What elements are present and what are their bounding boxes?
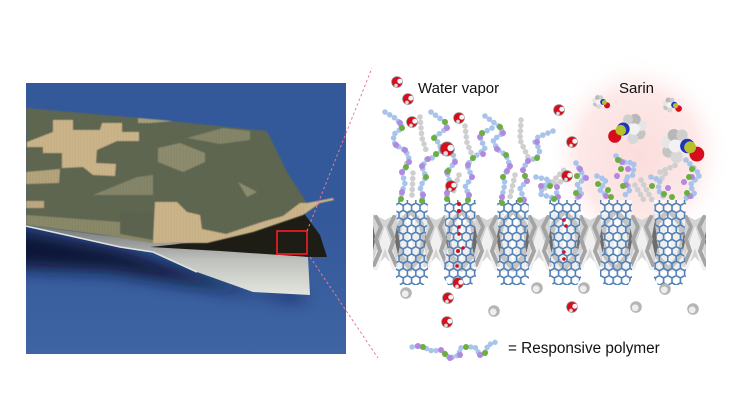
- sarin molecules: [592, 95, 704, 163]
- white fabric layer: [26, 225, 310, 295]
- white fabric front edge: [26, 226, 197, 272]
- label: Water vapor: Water vapor: [418, 80, 499, 97]
- carbon nanotubes: [396, 200, 686, 285]
- grey collapsed and background chains: [412, 117, 676, 202]
- polymer purple beads: [393, 120, 695, 203]
- shadow under fabric: [10, 226, 310, 300]
- photo background: blue surface: [26, 83, 346, 354]
- carbon sheets: [357, 212, 723, 272]
- compressed responsive polymer chains: sarin side: [536, 156, 700, 200]
- legend text: = Responsive polymer: [508, 340, 660, 357]
- panel: fabric photograph: [10, 83, 346, 354]
- legend polymer chain: [412, 342, 496, 361]
- polymer green beads: [398, 119, 695, 206]
- water fragments inside nanotubes: [455, 202, 568, 268]
- legend: responsive polymer: [412, 340, 660, 361]
- water molecules: [392, 77, 577, 327]
- label: Sarin: Sarin: [619, 80, 654, 97]
- red selection box: [277, 231, 307, 254]
- panel: membrane schematic: [373, 75, 711, 328]
- grey counter spheres: [400, 282, 699, 317]
- camouflage fabric layer: [26, 108, 334, 243]
- extended responsive polymer chains: water vapor side: [385, 112, 553, 203]
- pink sarin glow: [546, 55, 730, 255]
- black membrane layer: [150, 212, 327, 257]
- zoom lines: [307, 68, 378, 358]
